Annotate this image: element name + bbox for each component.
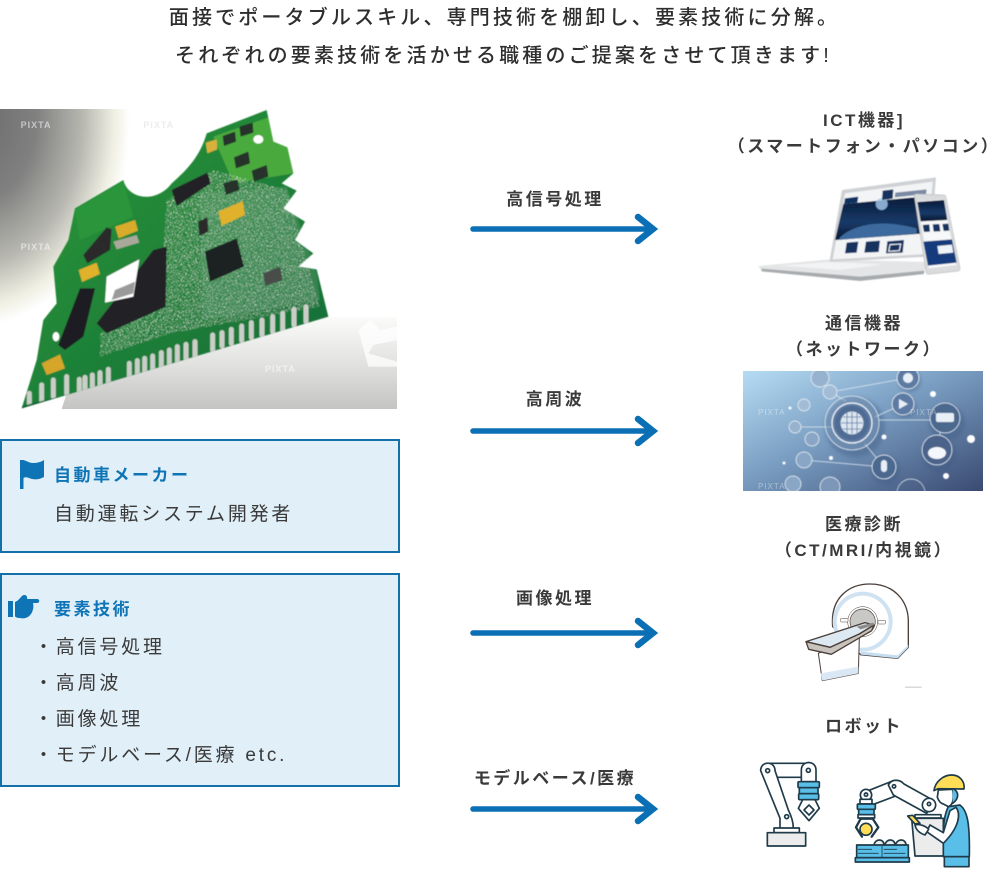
heading: telecom devices: 通信機器 xyxy=(825,314,903,333)
arrow 1 xyxy=(470,214,658,244)
watermark text: PIXTA xyxy=(758,482,786,491)
panel: element technologies xyxy=(0,573,400,787)
photo: circuit board xyxy=(0,109,397,409)
watermark text: PIXTA xyxy=(21,120,52,130)
left robot arm xyxy=(761,762,819,846)
element technologies list: ・モデルベース/医療 etc. xyxy=(34,745,287,766)
arrow 3 xyxy=(470,618,658,648)
label: high frequency: 高周波 xyxy=(526,390,584,409)
title: 面接でポータブルスキル、専門技術を棚卸し、要素技術に分解。 xyxy=(169,7,840,29)
heading: medical diagnostics xyxy=(775,515,953,560)
arrow 4 xyxy=(470,794,658,824)
watermark text: PIXTA xyxy=(21,242,52,252)
panel: automaker xyxy=(0,439,400,553)
watermark text xyxy=(758,408,938,491)
watermark text: PIXTA xyxy=(910,408,938,417)
icon: flag xyxy=(20,460,44,489)
gold contacts are clipped inside the board xyxy=(29,307,306,405)
icon: pointing hand xyxy=(8,595,40,618)
automaker role: 自動運転システム開発者 xyxy=(54,504,293,525)
image: laptop and phone xyxy=(758,177,961,282)
illustration: MRI scanner xyxy=(805,583,922,688)
label: image processing: 画像処理 xyxy=(516,589,594,608)
arrow 2 xyxy=(470,416,658,446)
automaker heading: 自動車メーカー xyxy=(54,466,190,485)
image: network xyxy=(743,371,983,491)
heading: medical diagnostics: 医療診断 xyxy=(825,515,903,534)
label: model based / medical: モデルベース/医療 xyxy=(474,769,636,788)
heading: medical diagnostics: （CT/MRI/内視鏡） xyxy=(775,541,953,560)
tantalum capacitors xyxy=(218,201,245,226)
label: high-speed signal: 高信号処理 xyxy=(506,190,604,209)
heading: robots: ロボット xyxy=(825,717,903,736)
heading: ICT devices: （スマートフォン・パソコン） xyxy=(728,137,1000,156)
element technologies list xyxy=(34,637,287,766)
watermark text: PIXTA xyxy=(758,408,786,417)
conveyor xyxy=(855,840,909,862)
heading: ICT devices xyxy=(728,111,1000,156)
element technologies list: ・高信号処理 xyxy=(34,637,165,658)
worker xyxy=(908,775,969,867)
element technologies list: ・画像処理 xyxy=(34,709,143,730)
watermark text xyxy=(21,120,296,374)
heading: ICT devices: ICT機器] xyxy=(823,111,905,130)
title xyxy=(169,6,840,67)
right robot arm xyxy=(856,780,943,856)
heading: telecom devices: （ネットワーク） xyxy=(786,340,942,359)
chips xyxy=(97,247,167,333)
illustration: robots and worker xyxy=(760,762,970,868)
element technologies list: ・高周波 xyxy=(34,673,121,694)
watermark text: PIXTA xyxy=(265,364,296,374)
watermark text: PIXTA xyxy=(143,120,174,130)
element technologies heading: 要素技術 xyxy=(54,600,132,619)
title: それぞれの要素技術を活かせる職種のご提案をさせて頂きます! xyxy=(175,45,832,67)
heading: telecom devices xyxy=(786,314,942,359)
